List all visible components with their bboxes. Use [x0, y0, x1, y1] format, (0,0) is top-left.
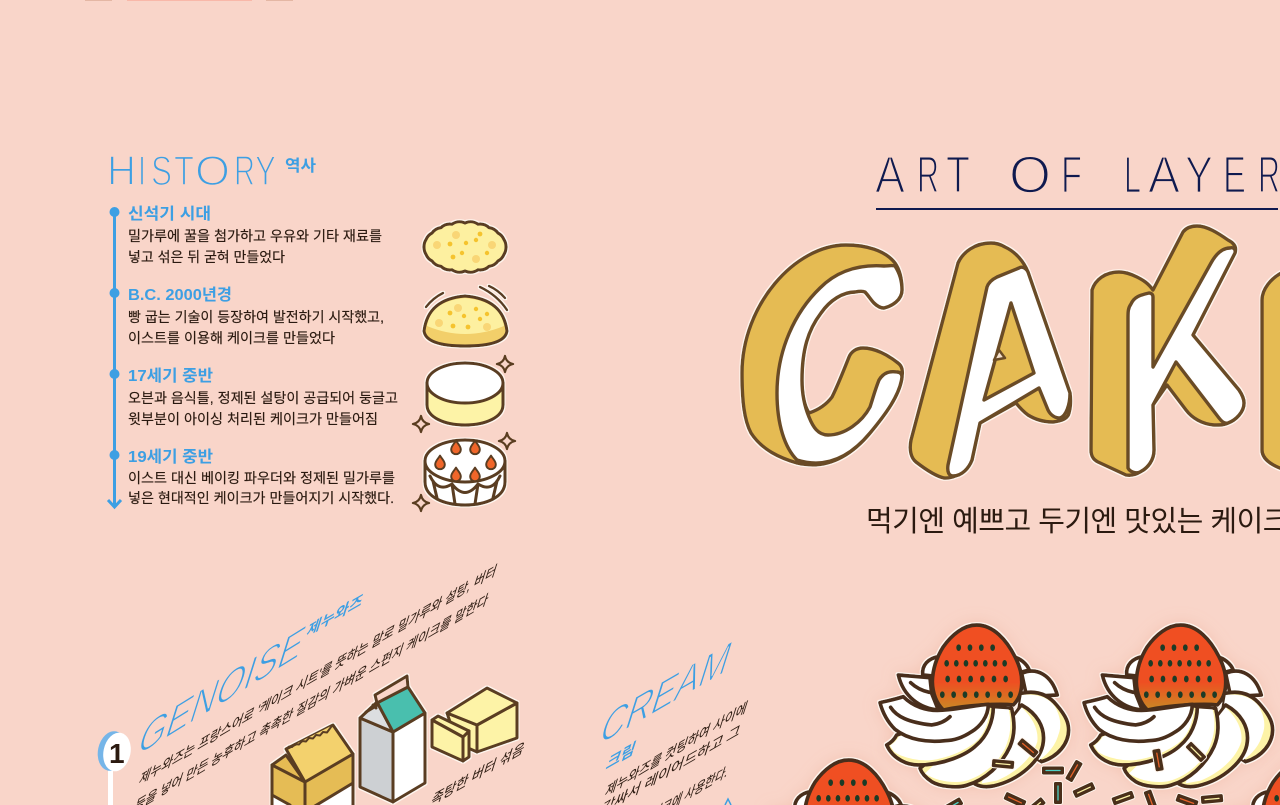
title line: ART OF LAYERS: O	[1009, 146, 1051, 204]
history entry: neolithic: 신석기 시대	[128, 205, 211, 223]
history entry: mid 17th century: 윗부분이 아이싱 처리된 케이크가 만들어짐	[128, 411, 378, 427]
title line: ART OF LAYERS: Y	[1185, 146, 1213, 204]
subtitle: 먹기엔 예쁘고 두기엔 맛있는 케이크	[866, 506, 1280, 538]
title line: ART OF LAYERS: R	[917, 146, 939, 204]
title rule	[876, 208, 1278, 210]
heading: GENOISE: GENOISE	[132, 614, 312, 767]
icon: sparkles	[413, 356, 515, 511]
icon: flat dough	[424, 222, 506, 272]
cream swirl with strawberry 1	[880, 625, 1069, 787]
title line: ART OF LAYERS: F	[1061, 146, 1082, 204]
history entry: mid 17th century	[128, 367, 398, 427]
icon: butter	[432, 688, 517, 761]
heading: HISTORY: O	[195, 147, 230, 194]
title letter: A	[910, 243, 1071, 478]
icon: decorated cake	[425, 440, 505, 505]
title letter: C	[742, 245, 902, 465]
title line: ART OF LAYERS: T	[946, 146, 970, 204]
timeline axis with arrow	[108, 207, 121, 507]
heading: HISTORY: T	[174, 147, 194, 194]
title line: ART OF LAYERS: E	[1223, 146, 1246, 204]
heading: HISTORY: 역사	[285, 157, 316, 175]
cream description: 제누와즈를 컷팅하여 사이에	[603, 699, 750, 801]
heading: HISTORY: S	[151, 147, 172, 194]
heading: HISTORY: Y	[255, 147, 276, 194]
history entry: mid 19th century	[128, 448, 395, 506]
history entry: B.C. 2000: 이스트를 이용해 케이크를 만들었다	[128, 330, 335, 346]
history entry: mid 19th century: 19세기 중반	[128, 448, 213, 466]
title line: ART OF LAYERS: A	[875, 146, 905, 204]
cream swirl with strawberry 2	[1084, 625, 1273, 787]
chocolate sprinkles	[940, 737, 1224, 805]
step badge: 1	[94, 729, 134, 805]
cream swirl with strawberry 3	[752, 760, 941, 805]
heading: HISTORY: I	[138, 147, 146, 194]
history entry: B.C. 2000: B.C. 2000년경	[128, 286, 232, 304]
icon: risen bread	[424, 286, 507, 346]
history entry: mid 17th century: 오븐과 음식틀, 정제된 설탕이 공급되어 둥글고	[128, 390, 398, 406]
title letter: E (cropped)	[1262, 271, 1280, 470]
genoise description: 제누와즈는 프랑스어로 '케이크 시트'를 뜻하는 말로 밀가루와 설탕, 버터	[137, 562, 499, 789]
icon: milk carton	[360, 676, 425, 802]
title line: ART OF LAYERS	[875, 146, 1280, 204]
history entry: mid 19th century: 이스트 대신 베이킹 파우더와 정제된 밀가루를	[128, 470, 395, 486]
history entry: mid 19th century: 넣은 현대적인 케이크가 만들어지기 시작했다.	[128, 490, 394, 506]
cream swirl with strawberry 4	[1210, 760, 1280, 805]
title letter: K	[1091, 226, 1244, 475]
history entry: B.C. 2000: 빵 굽는 기술이 등장하여 발전하기 시작했고,	[128, 309, 384, 325]
step badge: 1: 1	[109, 738, 125, 769]
heading: 크림: 크림	[604, 738, 638, 774]
heading: HISTORY	[107, 147, 316, 194]
title line: ART OF LAYERS: A	[1148, 146, 1180, 204]
history entry: neolithic: 밀가루에 꿀을 첨가하고 우유와 기타 재료를	[128, 228, 382, 244]
heading: CREAM: CREAM	[594, 629, 739, 756]
icon: iced cake	[427, 363, 503, 425]
history entry: neolithic	[128, 205, 382, 265]
heading: HISTORY: H	[107, 147, 136, 194]
icon: flour carton	[272, 725, 353, 805]
title line: ART OF LAYERS: L	[1124, 146, 1141, 204]
heading: 제누와즈: 제누와즈	[304, 591, 365, 641]
partial heading below cream	[725, 799, 731, 805]
history entry: neolithic: 넣고 섞은 뒤 굳혀 만들었다	[128, 249, 285, 265]
history entry: mid 17th century: 17세기 중반	[128, 367, 213, 385]
heading: HISTORY: R	[234, 147, 255, 194]
history entry: B.C. 2000	[128, 286, 384, 346]
